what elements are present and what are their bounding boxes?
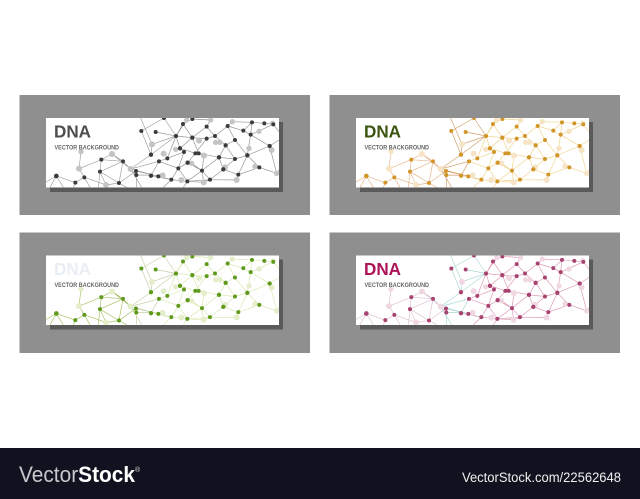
panel: green DNA banner (20, 232, 310, 353)
subtitle: VECTOR BACKGROUND (364, 283, 430, 289)
logo: VectorStock: VectorStock (19, 462, 136, 487)
heading: DNA: DNA (364, 122, 401, 142)
heading: DNA: DNA (364, 259, 401, 279)
network graphic: magenta (356, 254, 589, 325)
subtitle: VECTOR BACKGROUND (54, 283, 120, 289)
network graphic: orange (356, 116, 589, 188)
image id: VectorStock.com/22562648 (462, 470, 621, 485)
subtitle: VECTOR BACKGROUND (54, 146, 120, 152)
panel: magenta DNA banner (330, 232, 620, 353)
panel: orange DNA banner (330, 95, 620, 215)
network graphic: green (46, 254, 279, 325)
panel: grey DNA banner (20, 95, 310, 215)
heading: DNA: DNA (54, 259, 91, 279)
subtitle: VECTOR BACKGROUND (364, 146, 430, 152)
footer bar (0, 448, 640, 499)
heading: DNA: DNA (54, 122, 91, 142)
network graphic: grey (46, 116, 279, 188)
registered mark: ® (135, 466, 141, 474)
